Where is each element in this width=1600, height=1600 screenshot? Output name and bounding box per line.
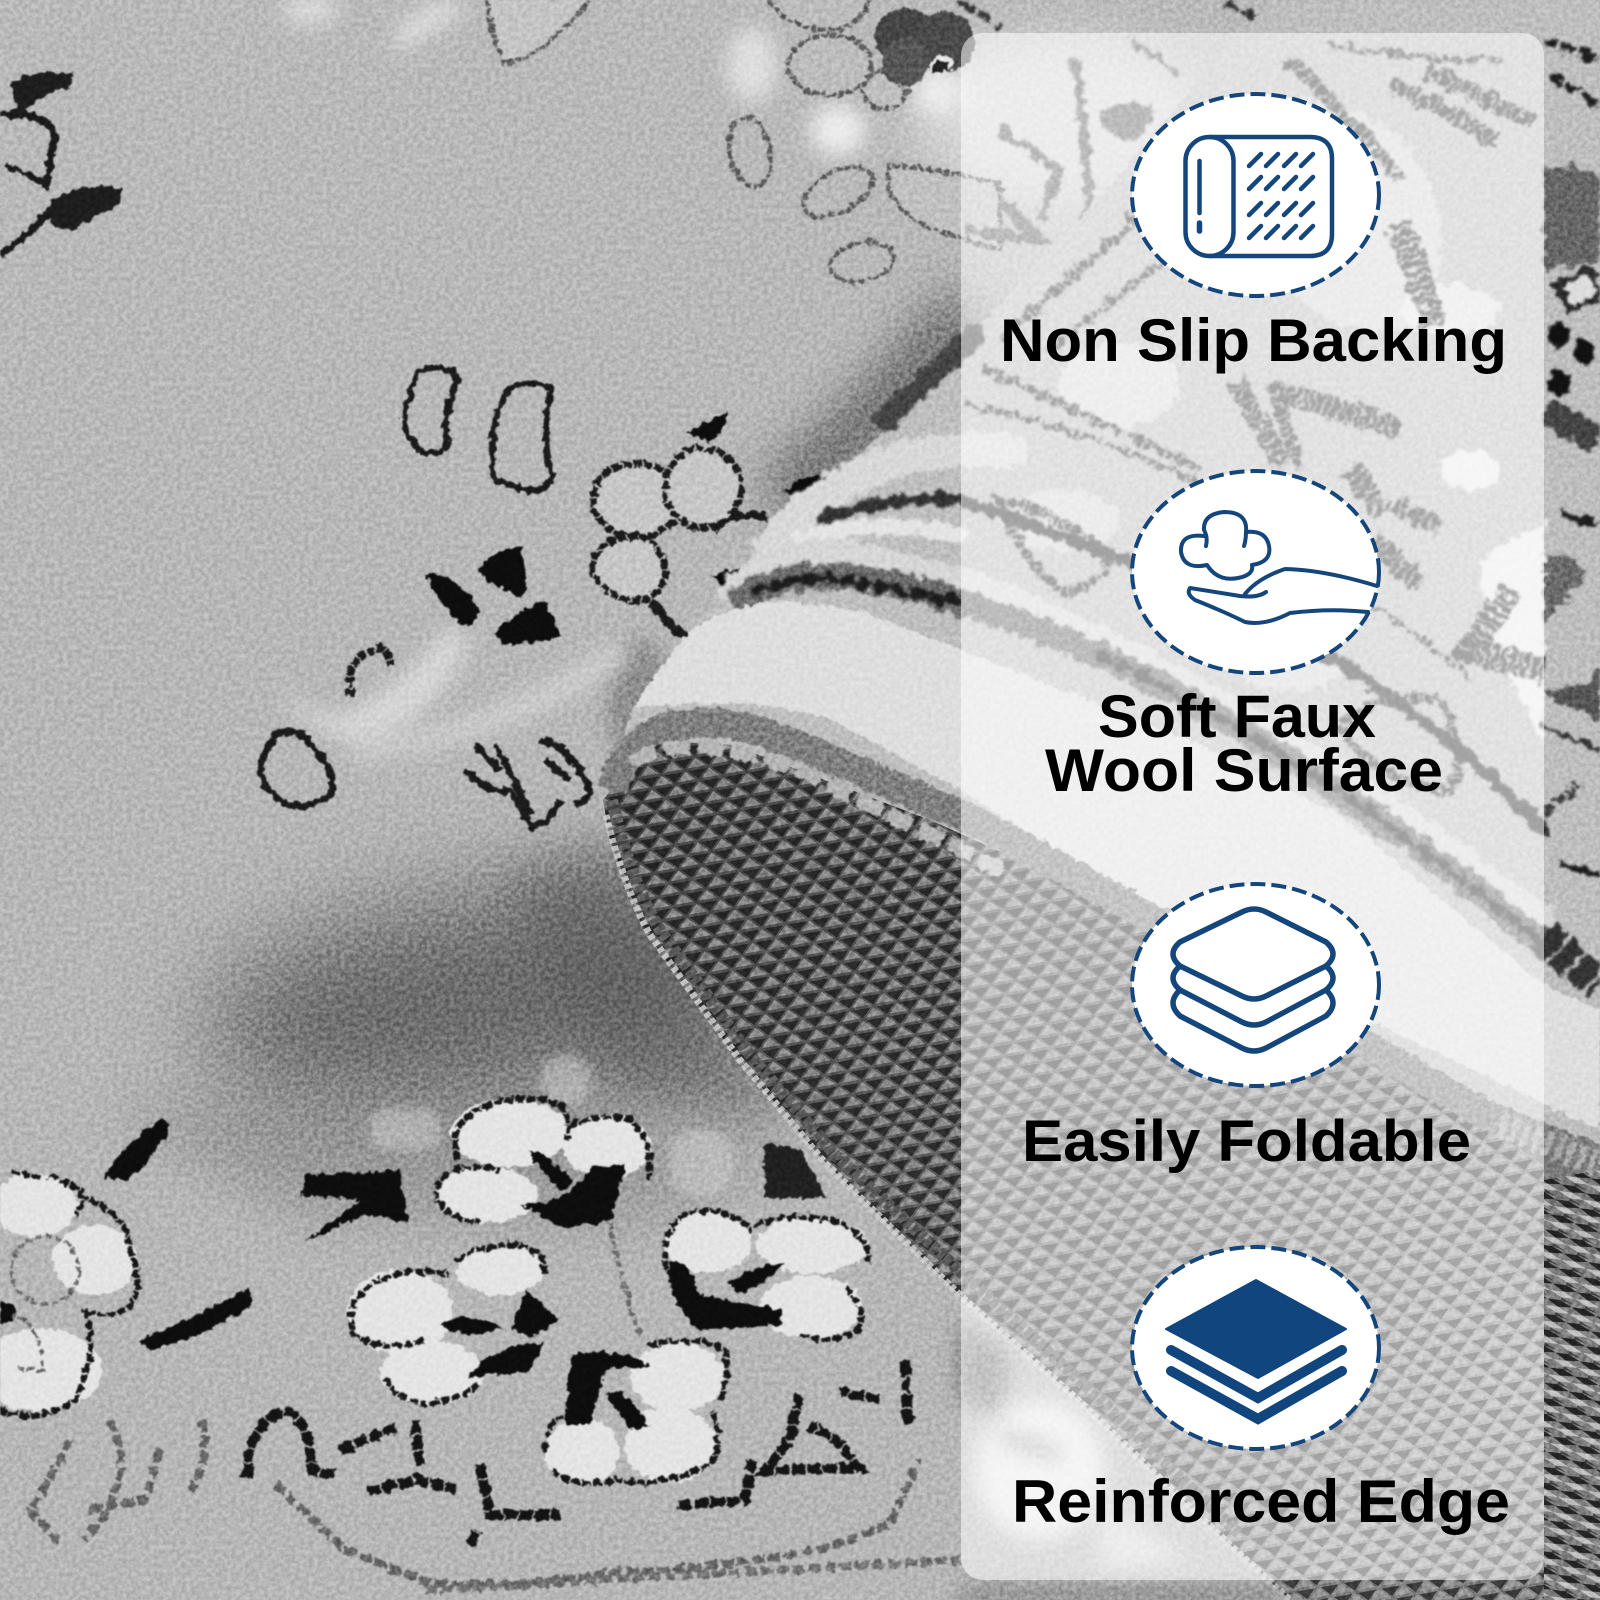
- floor pattern: upper dark flower outlines: [0, 72, 840, 826]
- rolled rug: pile surface: [603, 0, 1600, 1170]
- rolled rug: white pile band: [633, 603, 1600, 1130]
- icon: hand holding cotton: [1132, 471, 1379, 673]
- label: easily foldable: Easily Foldable: [1022, 1109, 1471, 1174]
- label: non slip backing: Non Slip Backing: [1000, 307, 1507, 374]
- label: reinforced edge: Reinforced Edge: [1012, 1468, 1510, 1535]
- rolled rug: canvas backing: [603, 740, 1600, 1600]
- rolled rug: stitched edge binding: [612, 723, 1600, 1165]
- right edge rug motifs: [1544, 40, 1600, 985]
- feature: soft faux wool surface: [1045, 471, 1443, 804]
- panel: feature list: [961, 33, 1544, 1580]
- icon: stacked folded layers: [1132, 884, 1379, 1086]
- floor pattern: faded top motifs: [278, 0, 1500, 760]
- lower floor patch under panel: [960, 1320, 1290, 1600]
- feature: reinforced edge: [1012, 1247, 1510, 1535]
- icon: rolled rug backing: [1132, 94, 1379, 296]
- label: soft faux wool surface: Wool Surface: [1045, 737, 1443, 804]
- rolled rug: patterned border bands: [730, 335, 1544, 945]
- label: soft faux wool surface: [1045, 683, 1443, 804]
- floor pattern: lower flower cluster: [0, 1054, 960, 1590]
- label: soft faux wool surface: Soft Faux: [1098, 683, 1376, 750]
- feature: non slip backing: [1000, 94, 1507, 374]
- feature: easily foldable: [1022, 884, 1471, 1174]
- panel background: [961, 33, 1544, 1580]
- icon: solid layered edge: [1132, 1247, 1379, 1449]
